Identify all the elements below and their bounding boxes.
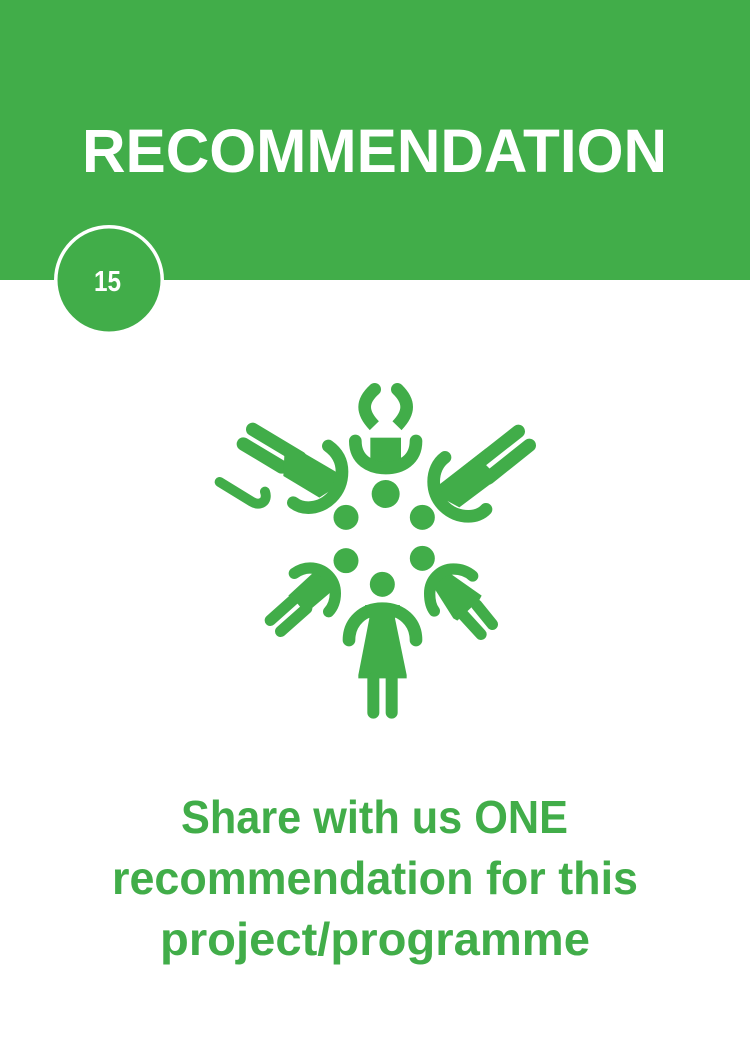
prompt text: Share with us ONE xyxy=(181,791,568,843)
prompt text: recommendation for this xyxy=(112,852,638,904)
icon: lower left figure xyxy=(270,548,358,631)
number badge xyxy=(54,225,164,335)
icon: right reclining figure xyxy=(410,431,529,530)
icon: left reclining figure xyxy=(220,429,358,530)
header band xyxy=(0,0,750,280)
icon: lower right figure xyxy=(410,546,492,634)
upper figures and heads xyxy=(220,383,529,530)
icon: centre figure xyxy=(349,572,416,713)
prompt text: project/programme xyxy=(160,913,590,965)
lower figures xyxy=(270,546,492,713)
icon: group of figures xyxy=(220,383,529,713)
icon: top figure xyxy=(355,383,416,508)
title: RECOMMENDATION xyxy=(82,117,667,185)
prompt text xyxy=(112,791,638,965)
number badge: 15 xyxy=(94,266,121,298)
